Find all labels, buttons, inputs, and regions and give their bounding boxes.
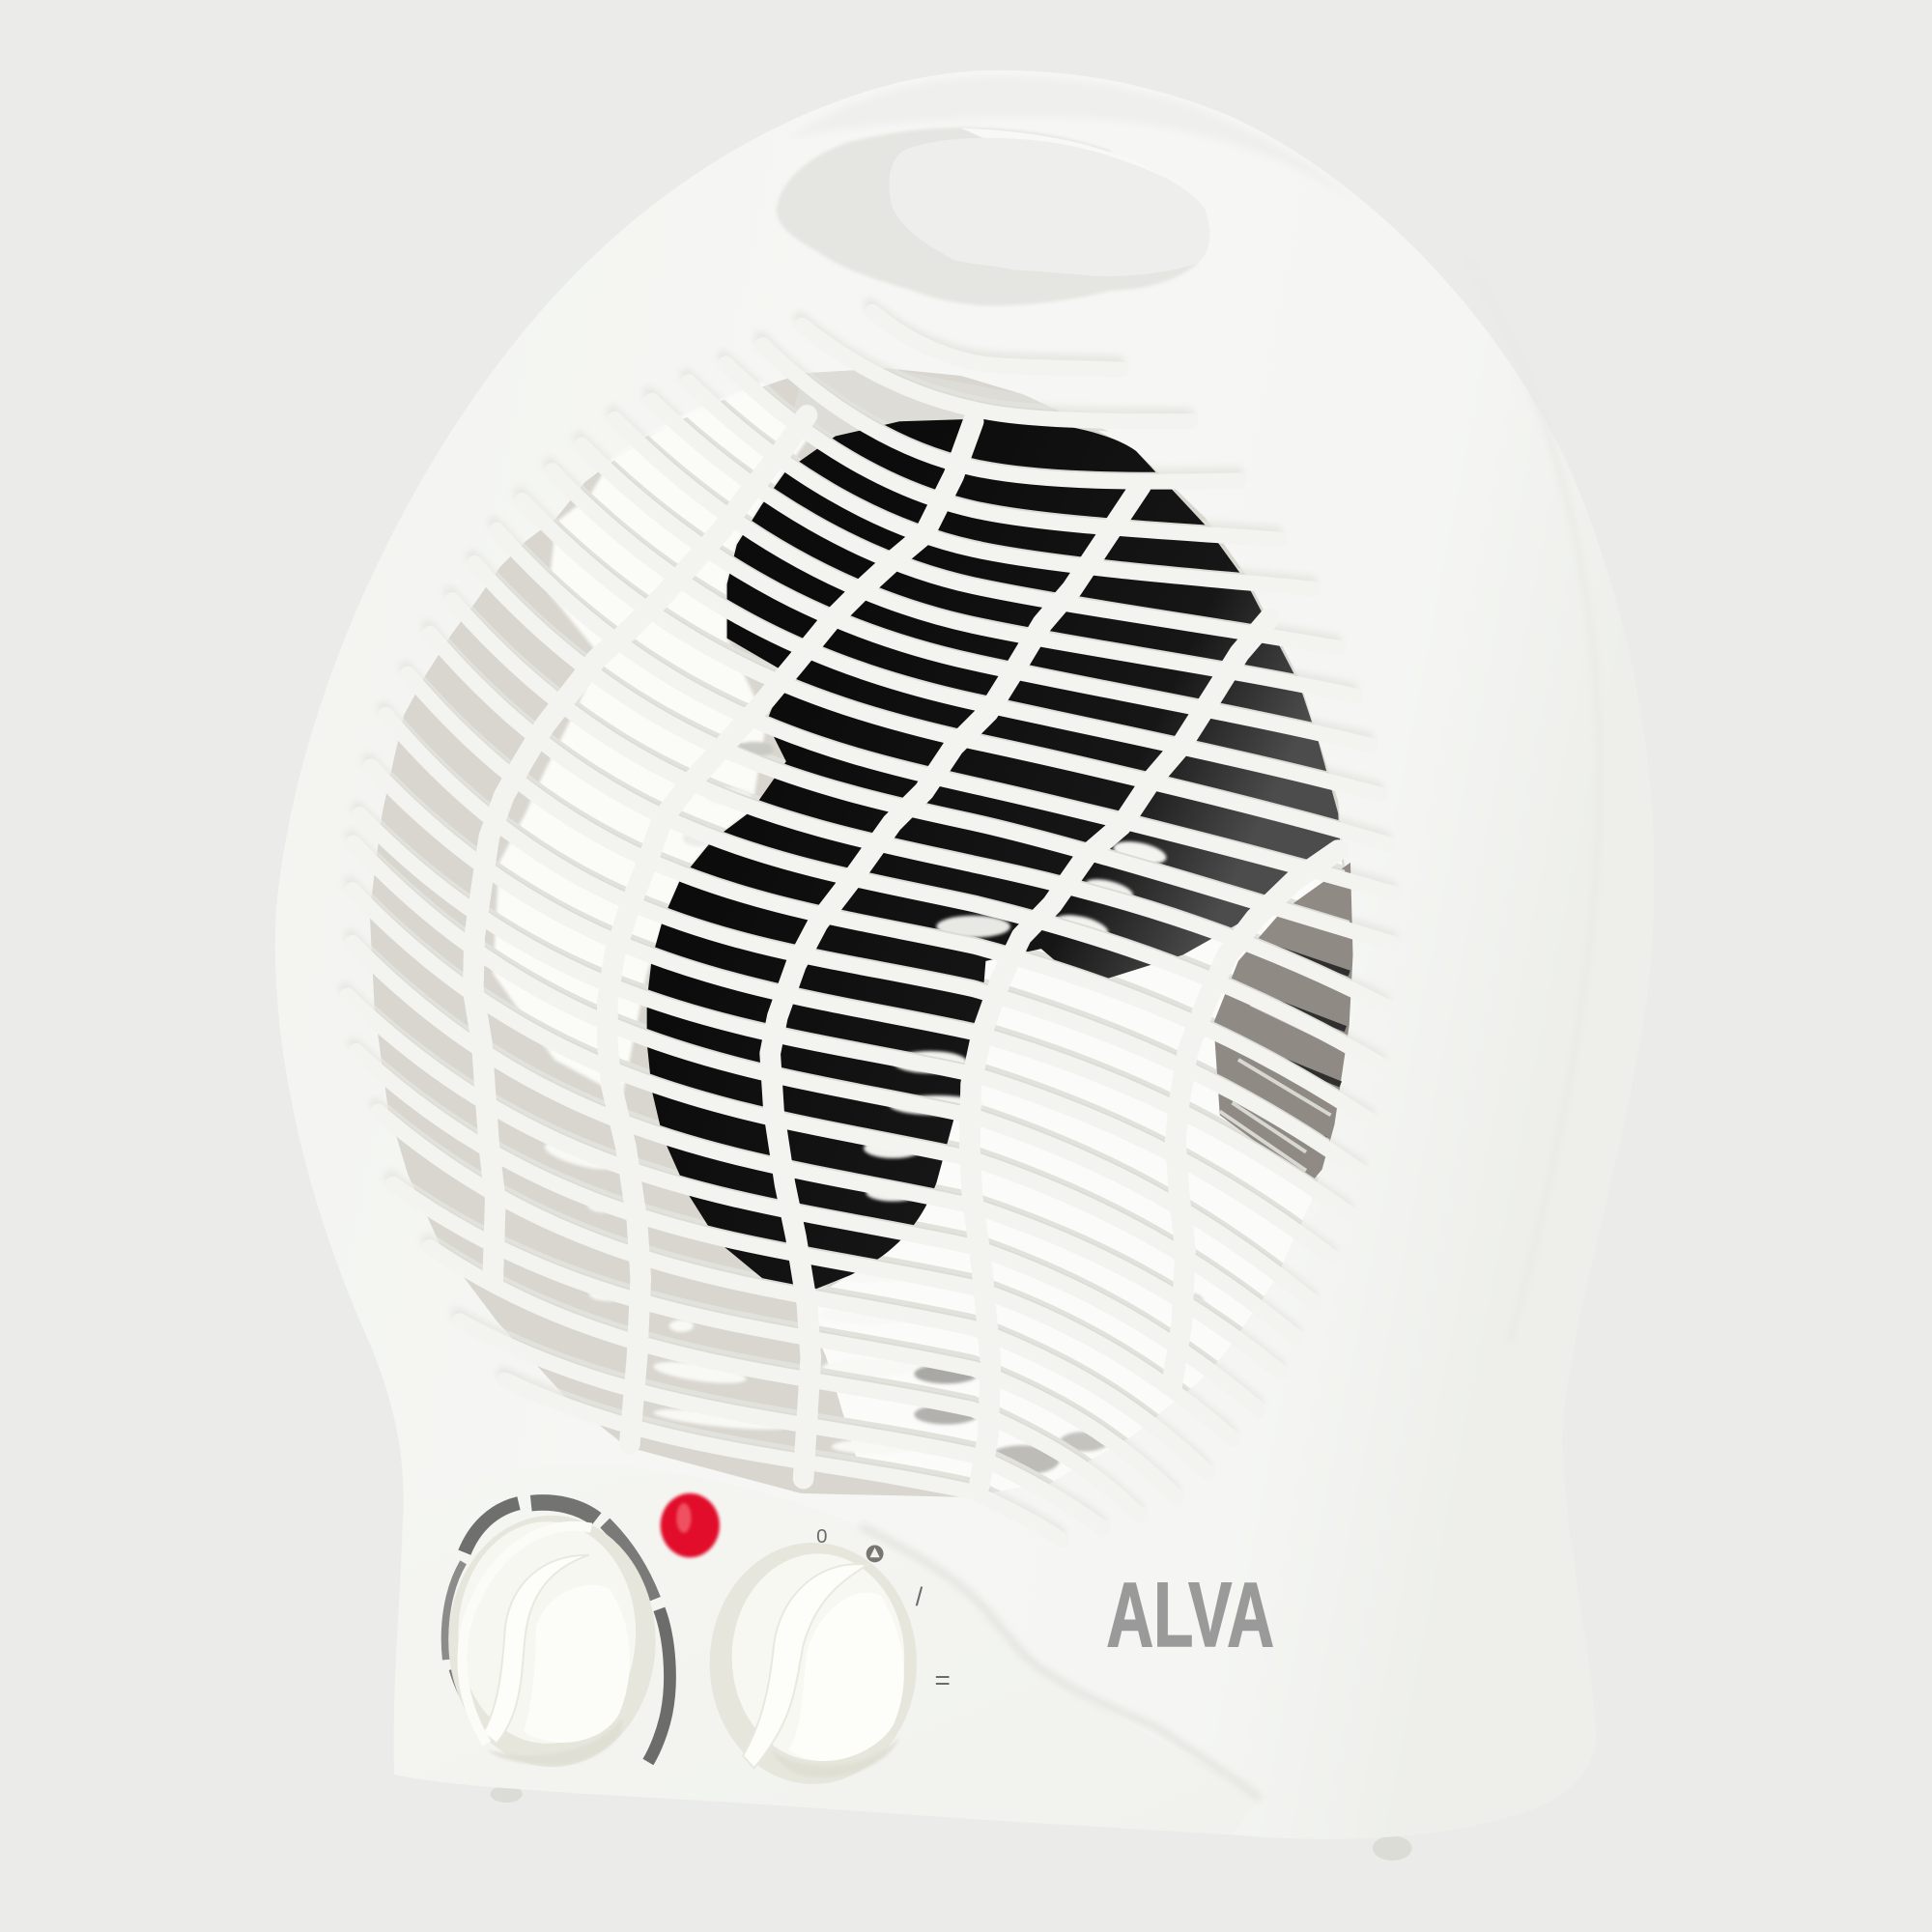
brand logo: ALVA: [1106, 1565, 1274, 1666]
mode labels: 0: [816, 1526, 827, 1548]
reflection patches on fan motor: [683, 742, 1168, 1202]
grille opening: [370, 368, 1352, 1497]
soft rib shadows on the shell: [345, 304, 1391, 1533]
carry handle: [777, 128, 1213, 305]
reflective top slots: [788, 368, 1109, 437]
heater body shell: [275, 71, 1654, 1839]
mode knob: [710, 1543, 917, 1784]
mode labels: =: [935, 1665, 951, 1695]
temperature scale arc: [445, 1502, 669, 1762]
temperature knob: [448, 1516, 656, 1767]
tan slot white patches lower left: [542, 1137, 920, 1454]
indicator lamp: [661, 1493, 720, 1557]
reflective lower right interior: [801, 850, 1353, 1497]
knob ring: [463, 1526, 591, 1744]
grey patches low in opening: [914, 1293, 1204, 1475]
mode labels: /: [916, 1582, 923, 1611]
heating coil: [1213, 863, 1353, 1182]
black fan motor interior: [647, 419, 1341, 1300]
control panel: [394, 1463, 1261, 1834]
grille ribs: [348, 310, 1394, 1540]
rib underside bands over light slots: [371, 369, 1345, 1492]
bright reflective slots, upper left: [493, 382, 813, 1096]
product illustration: fan heater: [275, 71, 1540, 1861]
mode labels: [816, 1526, 951, 1695]
feet: [491, 1785, 1412, 1861]
